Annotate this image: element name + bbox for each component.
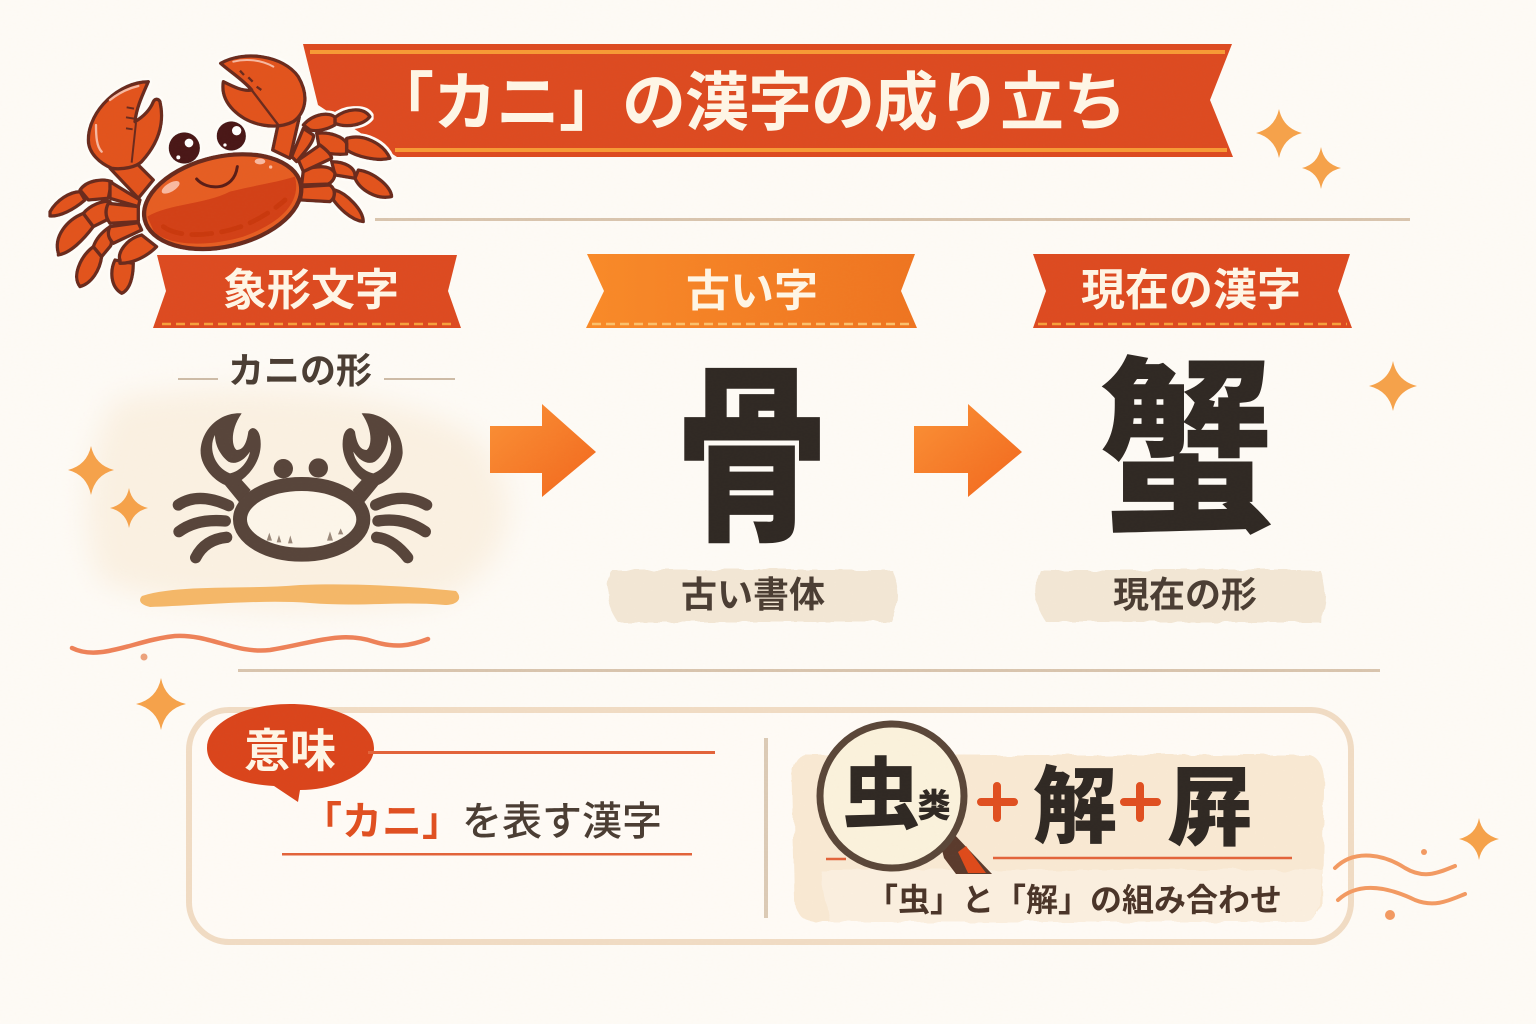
orange underlines bbox=[826, 858, 1292, 859]
left legs bbox=[50, 180, 157, 293]
claw arms bbox=[110, 163, 153, 198]
title text: 「カニ」の漢字の成り立ち bbox=[370, 67, 1127, 139]
orange brush stroke under pictograph bbox=[140, 584, 459, 607]
arrow 2 bbox=[914, 404, 1022, 497]
composition section wash bbox=[792, 755, 1324, 922]
old-form glyph: 骨 bbox=[675, 352, 829, 566]
sparkle right bbox=[1459, 818, 1499, 860]
magnifier with insect radical: 类 bbox=[918, 787, 950, 824]
sparkles top right bbox=[1256, 109, 1417, 411]
label: modern form: 現在の形 bbox=[1113, 574, 1257, 615]
bottom panel bbox=[189, 710, 1351, 942]
title banner bbox=[303, 44, 1233, 157]
right claw bbox=[221, 56, 305, 126]
label wash: modern form bbox=[1035, 570, 1326, 622]
wavy line left bbox=[72, 636, 428, 660]
label wash: old form bbox=[607, 570, 898, 622]
crab eyes bbox=[169, 121, 246, 164]
wash behind pictograph bbox=[87, 389, 508, 609]
composition glyphs: 解 bbox=[1033, 760, 1117, 854]
panel vertical divider bbox=[764, 738, 768, 918]
banner: pictograph: 象形文字 bbox=[223, 266, 399, 315]
modern kanji glyph: 蟹 bbox=[1100, 347, 1274, 556]
pictograph crab icon bbox=[178, 413, 427, 558]
speech bubble: meaning bbox=[207, 704, 374, 802]
divider middle bbox=[238, 669, 1380, 672]
banner: pictograph bbox=[153, 255, 461, 328]
banner: modern kanji: 現在の漢字 bbox=[1081, 266, 1301, 315]
label: crab shape: カニの形 bbox=[228, 350, 372, 391]
magnifier with insect radical bbox=[820, 724, 992, 874]
arrow 1 bbox=[490, 404, 596, 497]
banner: old character: 古い字 bbox=[686, 267, 818, 316]
right legs bbox=[292, 110, 392, 222]
composition glyphs: 屛 bbox=[1167, 761, 1253, 857]
banner: old character bbox=[586, 254, 917, 328]
crab illustration bbox=[50, 56, 392, 293]
wavy lines right bbox=[1335, 849, 1465, 920]
crab body bbox=[135, 140, 311, 263]
meaning section bbox=[207, 704, 715, 856]
meaning text: 「カニ」を表す漢字 bbox=[302, 800, 662, 844]
divider top bbox=[375, 218, 1410, 221]
label: old form: 古い書体 bbox=[681, 574, 825, 615]
magnifier with insect radical: 虫 bbox=[842, 751, 920, 839]
sparkles left bbox=[68, 446, 186, 730]
banner: modern kanji bbox=[1033, 254, 1352, 328]
composition caption: 「虫」と「解」の組み合わせ bbox=[866, 882, 1282, 918]
composition glyphs bbox=[981, 760, 1253, 857]
left claw bbox=[88, 82, 162, 169]
speech bubble: meaning: 意味 bbox=[244, 725, 336, 777]
